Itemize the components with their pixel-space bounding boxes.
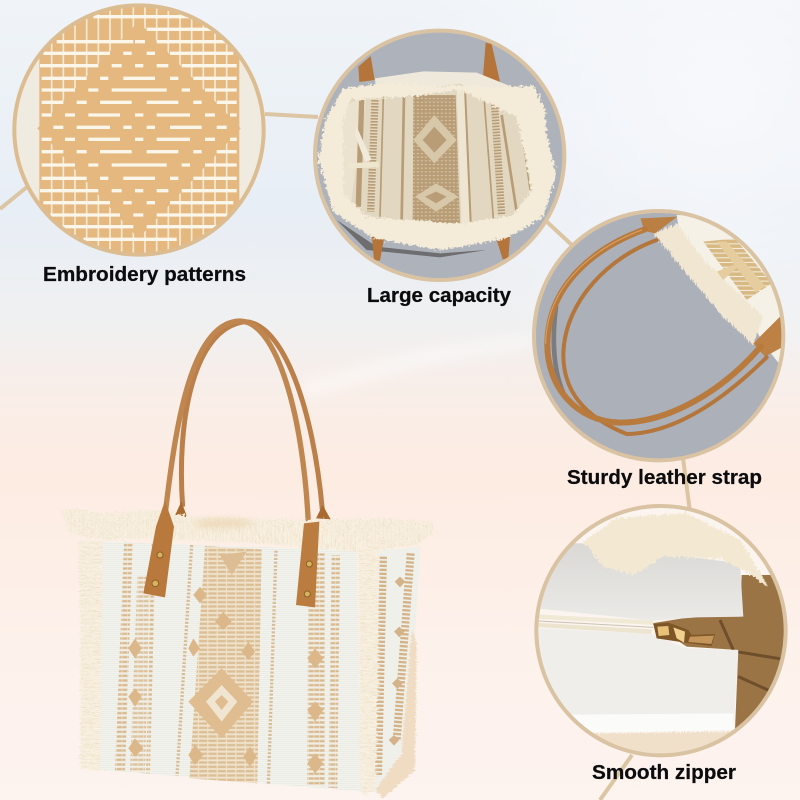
zipper pull — [653, 623, 715, 646]
bottom fringe — [594, 730, 732, 754]
front panel — [100, 542, 362, 792]
woven stripes — [115, 542, 340, 788]
detail circle: sturdy leather strap — [530, 207, 790, 467]
side bottom fringe — [375, 630, 417, 798]
right leather tab — [296, 522, 319, 607]
detail circle: smooth zipper — [530, 500, 797, 763]
label: sturdy leather strap: Sturdy leather strap — [567, 466, 762, 489]
top back fringe — [60, 508, 433, 550]
tan patch in top fringe — [193, 519, 253, 527]
back handle tabs — [174, 502, 331, 519]
top fringe — [583, 513, 768, 587]
left fringe — [78, 540, 105, 772]
label: embroidery patterns: Embroidery patterns — [43, 263, 246, 286]
handles — [546, 229, 767, 434]
side panel — [370, 547, 421, 793]
woven motif — [703, 238, 772, 300]
right fringe of front panel — [358, 543, 378, 795]
detail circle: large capacity — [310, 27, 570, 287]
diamond motifs — [128, 552, 323, 773]
front fringe top — [167, 523, 360, 552]
handle stubs — [358, 43, 510, 261]
front handle — [166, 321, 308, 523]
main tote bag — [60, 321, 433, 798]
bag corner fabric — [676, 215, 781, 363]
fringe rim — [318, 83, 556, 250]
canvas upper panel — [537, 543, 743, 621]
bag corner fringe — [653, 223, 763, 345]
leather tabs — [641, 217, 677, 233]
left leather tab — [143, 501, 174, 597]
brown lining — [652, 575, 790, 730]
zipper tape — [538, 617, 653, 632]
label: large capacity: Large capacity — [367, 284, 512, 307]
connector lines — [0, 114, 690, 800]
canvas lower panel — [538, 628, 738, 722]
rivets — [152, 552, 312, 597]
back handle — [181, 322, 322, 510]
label: smooth zipper: Smooth zipper — [592, 761, 736, 784]
interior — [337, 83, 537, 228]
detail circle: embroidery patterns — [10, 0, 270, 260]
